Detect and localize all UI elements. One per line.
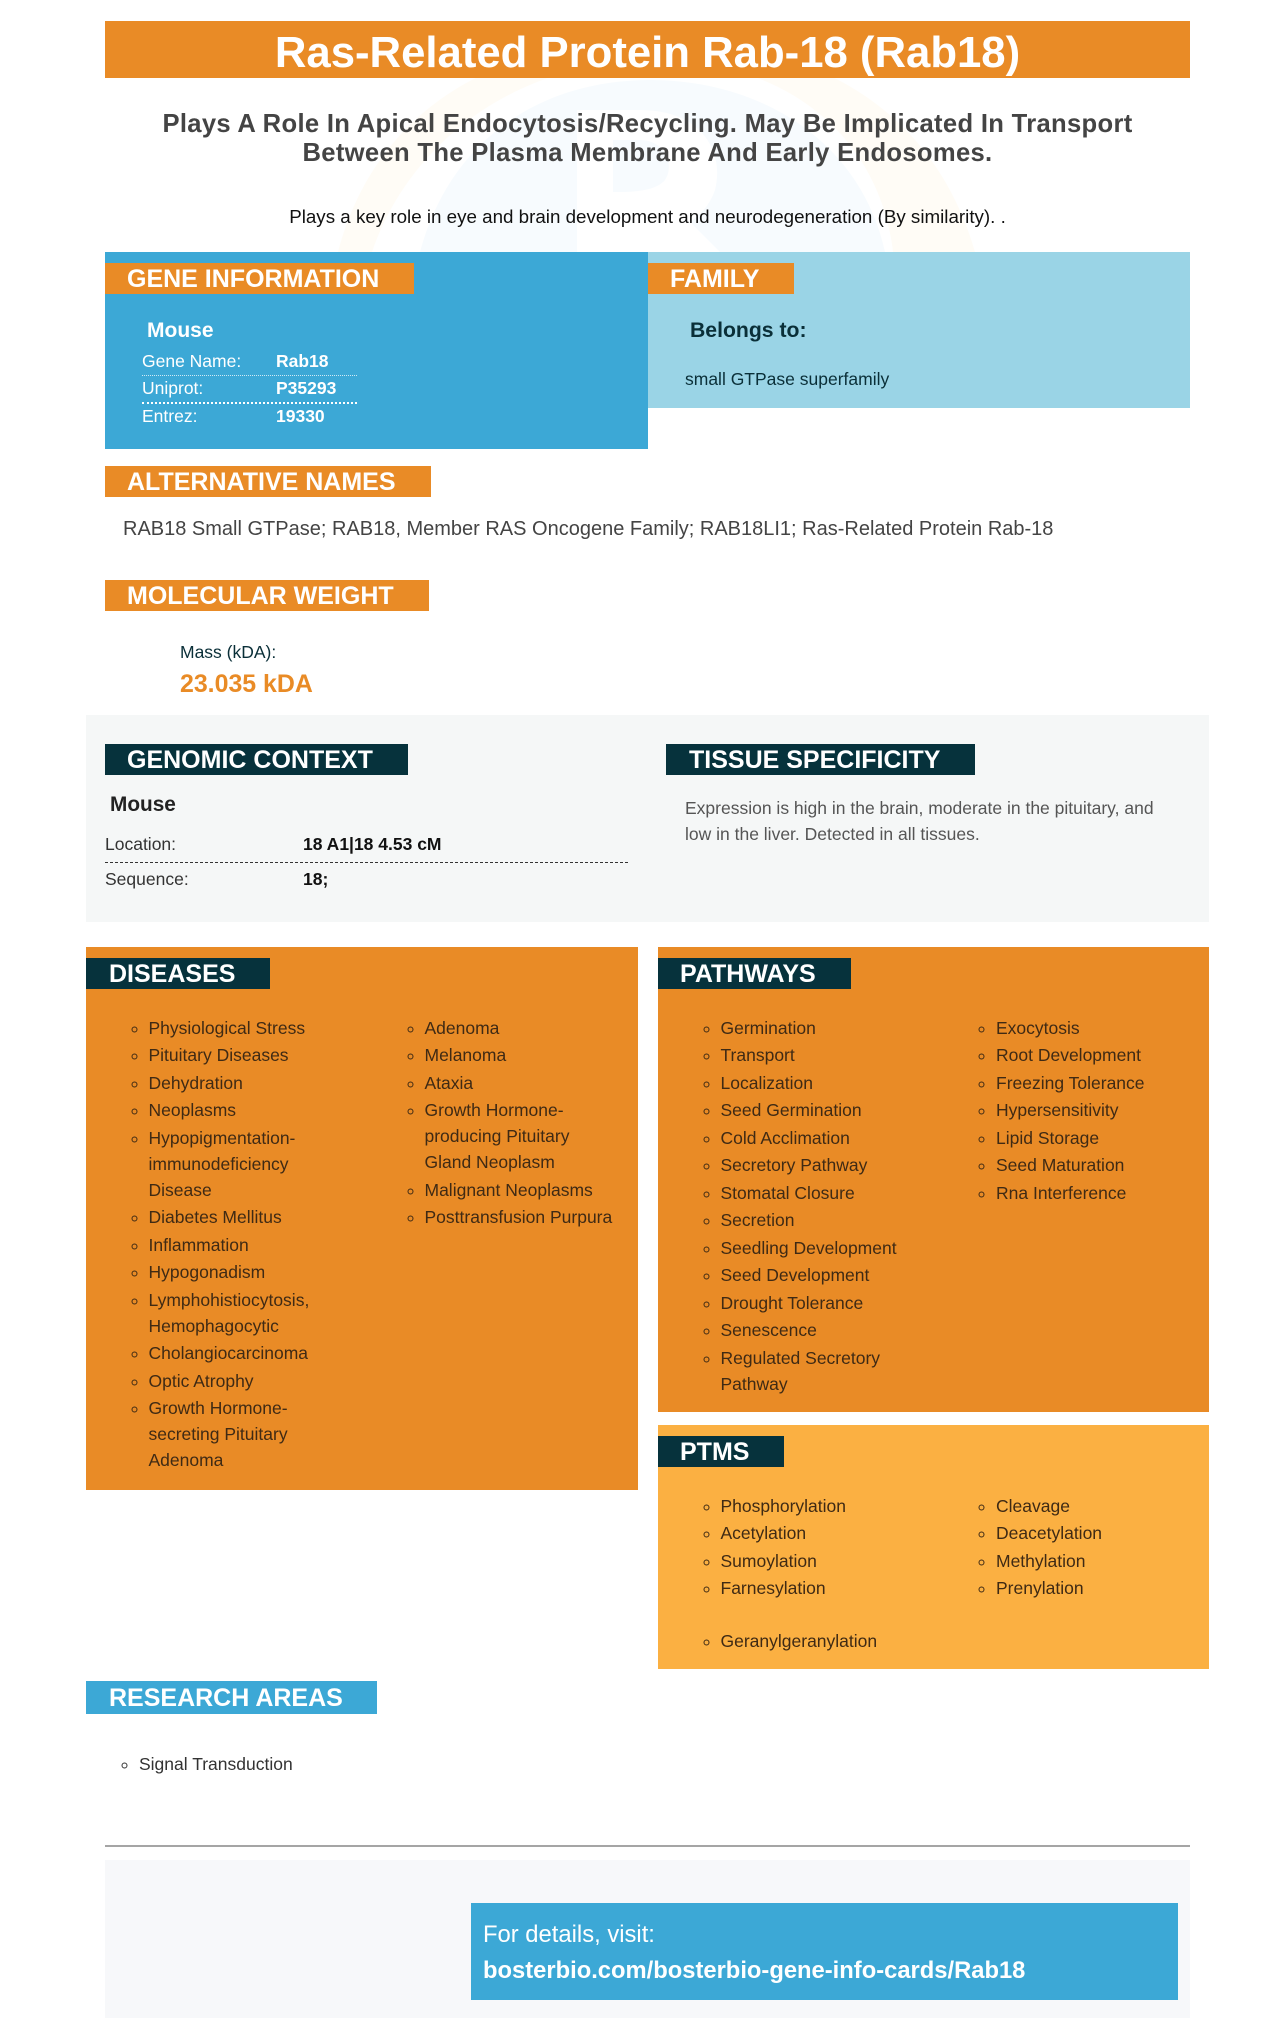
title: Ras-Related Protein Rab-18 (Rab18) (275, 28, 1020, 77)
tissue text (685, 798, 1154, 844)
ptms list column 1 (704, 1496, 846, 1598)
gene name row (142, 348, 357, 376)
diseases list column 1: Neoplasms (148, 1100, 236, 1120)
diseases list column 1: Hemophagocytic (148, 1316, 279, 1336)
subtitle (162, 110, 1133, 167)
gene name row: Gene Name: (142, 351, 241, 371)
heading: research areas: RESEARCH AREAS (109, 1684, 343, 1712)
heading: diseases: DISEASES (109, 960, 235, 988)
callout label: For details, visit: (483, 1921, 655, 1948)
ptms list column 1: Acetylation (720, 1523, 806, 1543)
location row: 18 A1|18 4.53 cM (303, 834, 442, 854)
subtitle: Plays A Role In Apical Endocytosis/Recycling. May Be Implicated In Transport (162, 110, 1133, 138)
pathways list column 2: Hypersensitivity (996, 1100, 1119, 1120)
panel: pathways (658, 947, 1209, 1412)
heading: gene information: GENE INFORMATION (127, 265, 379, 293)
diseases list column 2: Ataxia (424, 1073, 473, 1093)
pathways list column 2: Rna Interference (996, 1183, 1126, 1203)
sequence row: 18; (303, 869, 328, 889)
pathways list column 2 (978, 1018, 1145, 1203)
pathways list column 1: Stomatal Closure (720, 1183, 855, 1203)
pathways list column 2: Freezing Tolerance (996, 1073, 1145, 1093)
diseases list column 1 (132, 1018, 309, 1470)
panel: genomic context and tissue specificity (86, 715, 1209, 922)
title (105, 21, 1190, 78)
callout url: bosterbio.com/bosterbio-gene-info-cards/Rab18 (483, 1957, 1025, 1984)
panel: diseases (86, 947, 638, 1490)
diseases list column 1: Lymphohistiocytosis, (148, 1290, 309, 1310)
description: Plays a key role in eye and brain development and neurodegeneration (By similarity). . (289, 206, 1006, 227)
ptms list extra item: Geranylgeranylation (720, 1631, 877, 1651)
entrez row: Entrez: (142, 406, 197, 426)
family name: small GTPase superfamily (685, 369, 889, 389)
diseases list column 1: Adenoma (148, 1450, 223, 1470)
pathways list column 1: Drought Tolerance (720, 1293, 863, 1313)
heading: tissue specificity: TISSUE SPECIFICITY (689, 746, 940, 774)
species: Mouse (110, 793, 176, 816)
heading: ptms (658, 1436, 784, 1467)
ptms list column 1: Sumoylation (720, 1551, 817, 1571)
diseases list column 1: Physiological Stress (148, 1018, 305, 1038)
pathways list column 1: Regulated Secretory (720, 1348, 880, 1368)
diseases list column 1: Disease (148, 1180, 212, 1200)
diseases list column 1: Hypogonadism (148, 1262, 265, 1282)
ptms list column 2: Methylation (996, 1551, 1086, 1571)
pathways list column 1: Pathway (720, 1374, 788, 1394)
diseases list column 2: Growth Hormone- (424, 1100, 564, 1120)
pathways list column 1: Localization (720, 1073, 813, 1093)
pathways list column 1: Transport (720, 1045, 795, 1065)
location row: Location: (105, 834, 176, 854)
ptms list column 2 (978, 1496, 1102, 1598)
pathways list column 1: Cold Acclimation (720, 1128, 850, 1148)
diseases list column 1: immunodeficiency (148, 1154, 289, 1174)
diseases list column 2: Gland Neoplasm (424, 1152, 555, 1172)
research areas list: Signal Transduction (139, 1754, 293, 1774)
diseases list column 2: Malignant Neoplasms (424, 1180, 593, 1200)
uniprot row (142, 375, 357, 404)
uniprot row: P35293 (276, 378, 336, 398)
gene name row: Rab18 (276, 351, 329, 371)
pathways list column 2: Exocytosis (996, 1018, 1080, 1038)
panel: ptms (658, 1425, 1209, 1669)
diseases list column 1: Hypopigmentation- (148, 1128, 295, 1148)
panel: footer (105, 1860, 1190, 2018)
heading: pathways: PATHWAYS (680, 960, 816, 988)
diseases list column 1: Cholangiocarcinoma (148, 1343, 308, 1363)
pathways list column 1: Seedling Development (720, 1238, 897, 1258)
background watermark (338, 78, 974, 252)
pathways list column 1: Seed Germination (720, 1100, 862, 1120)
diseases list column 2: Posttransfusion Purpura (424, 1207, 612, 1227)
heading: family: FAMILY (670, 265, 759, 293)
callout: details link (471, 1903, 1178, 2000)
belongs to: Belongs to: (690, 319, 807, 342)
heading: family (648, 263, 794, 294)
heading: research areas (86, 1681, 377, 1714)
ptms list column 2: Deacetylation (996, 1523, 1102, 1543)
mass value: 23.035 kDA (180, 670, 313, 698)
heading: molecular weight: MOLECULAR WEIGHT (127, 582, 394, 610)
diseases list column 2: Melanoma (424, 1045, 506, 1065)
diseases list column 1: Diabetes Mellitus (148, 1207, 282, 1227)
heading: diseases (86, 958, 270, 989)
diseases list column 1: Inflammation (148, 1235, 249, 1255)
mass label: Mass (kDA): (180, 642, 276, 662)
species: Mouse (147, 319, 214, 342)
entrez row: 19330 (276, 406, 325, 426)
pathways list column 1: Seed Development (720, 1265, 869, 1285)
diseases list column 1: Growth Hormone- (148, 1398, 288, 1418)
tissue text: low in the liver. Detected in all tissues. (685, 824, 980, 844)
pathways list column 2: Root Development (996, 1045, 1141, 1065)
subtitle: Between The Plasma Membrane And Early Endosomes. (302, 139, 992, 167)
heading: genomic context: GENOMIC CONTEXT (127, 746, 373, 774)
panel: family (648, 252, 1190, 408)
pathways list column 1: Secretion (720, 1210, 794, 1230)
diseases list column 1: secreting Pituitary (148, 1424, 288, 1444)
alternative names text: RAB18 Small GTPase; RAB18, Member RAS Oncogene Family; RAB18LI1; Ras-Related Protein Rab-18 (123, 518, 1053, 540)
pathways list column 1: Germination (720, 1018, 816, 1038)
pathways list column 2: Seed Maturation (996, 1155, 1124, 1175)
heading: pathways (658, 958, 851, 989)
ptms list column 1: Farnesylation (720, 1578, 826, 1598)
diseases list column 1: Optic Atrophy (148, 1371, 254, 1391)
pathways list column 1 (704, 1018, 897, 1394)
diseases list column 1: Pituitary Diseases (148, 1045, 289, 1065)
location row (105, 831, 630, 863)
diseases list column 2 (408, 1018, 612, 1227)
pathways list column 2: Lipid Storage (996, 1128, 1099, 1148)
ptms list column 2: Prenylation (996, 1578, 1084, 1598)
diseases list column 1: Dehydration (148, 1073, 243, 1093)
uniprot row: Uniprot: (142, 378, 203, 398)
pathways list column 1: Senescence (720, 1320, 817, 1340)
ptms list column 2: Cleavage (996, 1496, 1070, 1516)
sequence row: Sequence: (105, 869, 189, 889)
diseases list column 2: producing Pituitary (424, 1126, 569, 1146)
divider (105, 1845, 1190, 1847)
ptms list column 1: Phosphorylation (720, 1496, 846, 1516)
heading: ptms: PTMS (680, 1438, 749, 1466)
heading: alternative names: ALTERNATIVE NAMES (127, 468, 396, 496)
panel: gene information (105, 252, 648, 449)
pathways list column 1: Secretory Pathway (720, 1155, 867, 1175)
tissue text: Expression is high in the brain, moderate in the pituitary, and (685, 798, 1154, 818)
diseases list column 2: Adenoma (424, 1018, 499, 1038)
entrez row (142, 406, 325, 426)
sequence row (105, 869, 328, 889)
